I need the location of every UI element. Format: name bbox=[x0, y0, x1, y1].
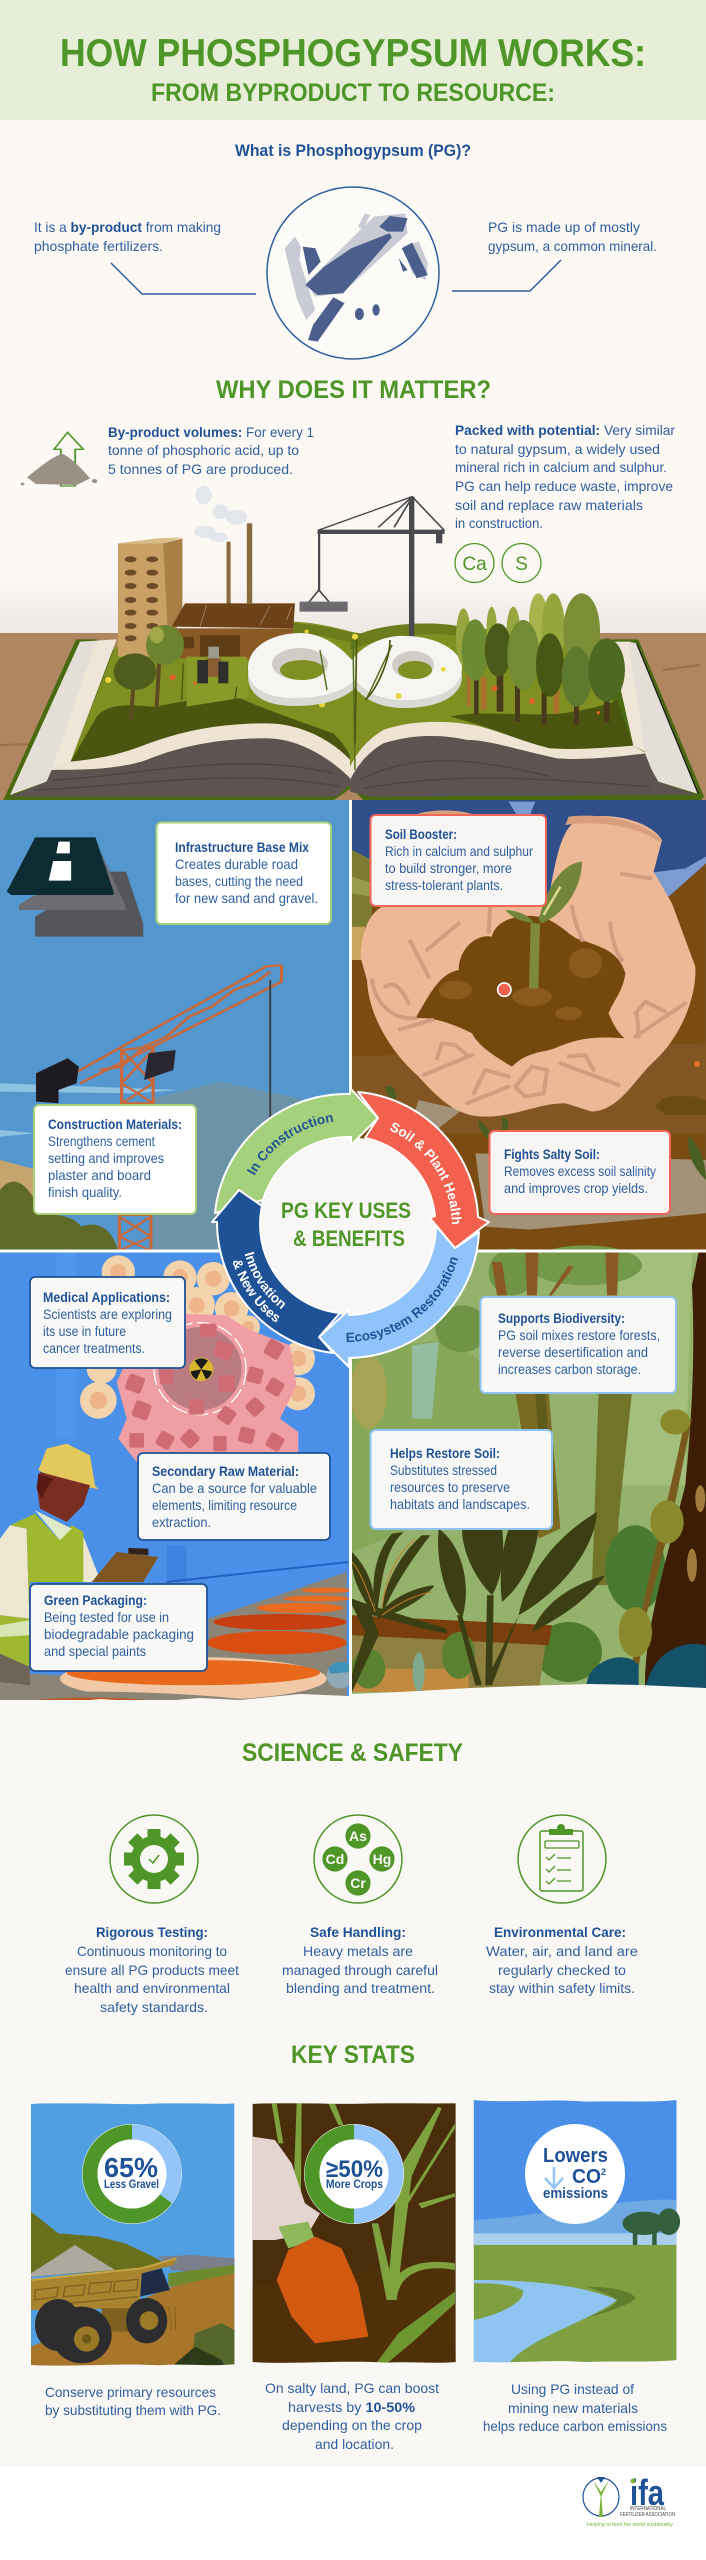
text: rigorous testing: ensure all PG products meet bbox=[65, 1962, 239, 1978]
text: safe handling: blending and treatment. bbox=[286, 1980, 435, 1996]
card: helps restore soil: Substitutes stressed bbox=[390, 1462, 497, 1478]
panel: soil and plant health bbox=[352, 800, 706, 1250]
callout line left bbox=[111, 263, 256, 294]
card: fights salty soil: Fights Salty Soil: bbox=[504, 1146, 600, 1162]
illustration: cells, worker and conveyor bbox=[0, 1252, 353, 1702]
footer band bbox=[0, 2467, 706, 2560]
text: environmental care bbox=[486, 1924, 638, 1996]
card: infrastructure base mix: bases, cutting the need bbox=[175, 873, 303, 889]
text: rigorous testing bbox=[65, 1924, 239, 2015]
text: made of gypsum: gypsum, a common mineral. bbox=[488, 238, 657, 254]
logo: IFA: FERTILIZER ASSOCIATION bbox=[620, 2512, 675, 2518]
illustration: open book with landscape bbox=[0, 486, 706, 803]
text: rigorous testing: health and environmental bbox=[74, 1980, 230, 1996]
caption: carbon emissions: Using PG instead of bbox=[511, 2381, 634, 2397]
text: environmental care: stay within safety limits. bbox=[489, 1980, 635, 1996]
section: science and safety bbox=[65, 1739, 638, 2015]
heading: PG key uses and benefits: & BENEFITS bbox=[293, 1226, 405, 1251]
icon: heavy metal elements: Hg bbox=[373, 1851, 391, 1867]
heading: PG key uses and benefits bbox=[281, 1198, 411, 1251]
icon: gear with check bbox=[110, 1815, 198, 1903]
panel: in construction bbox=[0, 800, 349, 1251]
donut: 65 percent bbox=[82, 2124, 182, 2224]
text: by-product volumes: 5 tonnes of PG are produced. bbox=[108, 461, 293, 477]
logo: IFA bbox=[583, 2472, 675, 2528]
card: secondary raw material bbox=[138, 1453, 330, 1540]
card: green packaging bbox=[30, 1584, 207, 1671]
diagram: PG key uses cycle bbox=[211, 1088, 490, 1368]
card: green packaging: Green Packaging: bbox=[44, 1592, 147, 1608]
badge: lowers CO2 emissions: Lowers bbox=[543, 2145, 608, 2167]
logo: IFA: Helping to feed the world sustainably bbox=[587, 2522, 673, 2528]
icon: pile with up arrow bbox=[21, 432, 97, 486]
icon: heavy metal elements: Cd bbox=[326, 1851, 344, 1867]
text: rigorous testing: Rigorous Testing: bbox=[96, 1924, 208, 1940]
card: supports biodiversity: Supports Biodiversity: bbox=[498, 1310, 625, 1326]
icon: checklist clipboard bbox=[518, 1815, 606, 1903]
panel dividers bbox=[0, 800, 706, 1700]
card: soil booster: to build stronger, more bbox=[385, 860, 512, 876]
center disc bbox=[258, 1137, 436, 1315]
caption: conserve resources: by substituting them with PG. bbox=[45, 2402, 221, 2418]
logo: IFA: ifa bbox=[630, 2472, 665, 2513]
arrow: innovation and new uses bbox=[211, 1189, 341, 1354]
card: supports biodiversity: increases carbon storage. bbox=[498, 1361, 641, 1377]
illustration: tower, chimneys and crane bbox=[118, 486, 445, 657]
card: construction materials: setting and improves bbox=[48, 1150, 164, 1166]
text: environmental care: Water, air, and land are bbox=[486, 1943, 638, 1959]
illustration: barn, tractor, trees bbox=[105, 603, 325, 720]
card: secondary raw material: Can be a source for valuable bbox=[152, 1480, 317, 1496]
text: packed with potential: PG can help reduce waste, improve bbox=[455, 478, 673, 494]
arrow: ecosystem restoration bbox=[320, 1226, 480, 1368]
card: green packaging: Being tested for use in bbox=[44, 1609, 169, 1625]
badge: lowers CO2 emissions: CO bbox=[572, 2166, 601, 2188]
panel: innovation and new uses bbox=[0, 1252, 353, 1702]
icon: heavy metal elements: As bbox=[349, 1828, 367, 1844]
card: secondary raw material: elements, limiting resource bbox=[152, 1497, 297, 1513]
callout line right bbox=[452, 260, 561, 291]
card: infrastructure base mix: Infrastructure Base Mix bbox=[175, 839, 309, 855]
caption: carbon emissions bbox=[483, 2381, 667, 2434]
card: construction materials: Construction Materials: bbox=[48, 1116, 182, 1132]
text: environmental care: regularly checked to bbox=[498, 1962, 626, 1978]
section: what is phosphogypsum bbox=[34, 142, 657, 359]
card: fights salty soil: Removes excess soil salinity bbox=[504, 1163, 656, 1179]
arrow: soil and plant health bbox=[357, 1091, 490, 1249]
text: by-product: It is a by-product from making bbox=[34, 219, 221, 235]
text: safe handling: Heavy metals are bbox=[303, 1943, 413, 1959]
card: infrastructure base mix: Creates durable road bbox=[175, 856, 298, 872]
icon: heavy metal elements bbox=[314, 1815, 402, 1903]
text: packed with potential: to natural gypsum, a widely used bbox=[455, 441, 660, 457]
card: construction materials: plaster and board bbox=[48, 1167, 151, 1183]
caption: boost harvests: harvests by 10-50% bbox=[288, 2399, 416, 2415]
subtitle: FROM BYPRODUCT TO RESOURCE: bbox=[151, 79, 555, 107]
card: infrastructure base mix bbox=[156, 822, 331, 924]
text: by-product volumes bbox=[108, 424, 314, 477]
text: made of gypsum bbox=[488, 219, 657, 254]
card: soil booster: Rich in calcium and sulphur bbox=[385, 843, 533, 859]
text: safe handling: managed through careful bbox=[282, 1962, 438, 1978]
caption: conserve resources bbox=[45, 2384, 221, 2418]
text: packed with potential: Packed with potential: Very similar bbox=[455, 422, 675, 438]
arrow: innovation and new uses: & New Uses bbox=[233, 1260, 280, 1322]
card: green packaging: and special paints bbox=[44, 1643, 146, 1659]
text: made of gypsum: PG is made up of mostly bbox=[488, 219, 640, 235]
icon: calcium badge bbox=[455, 544, 494, 582]
arrow: innovation and new uses: Innovation bbox=[244, 1252, 285, 1309]
icon: gypsum crystals in circle bbox=[267, 187, 439, 359]
donut: 50 percent more crops bbox=[304, 2124, 404, 2224]
text: by-product bbox=[34, 219, 221, 254]
title: HOW PHOSPHOGYPSUM WORKS: bbox=[60, 32, 646, 75]
stat card: mining truck bbox=[31, 2100, 234, 2418]
card: secondary raw material: extraction. bbox=[152, 1514, 211, 1530]
card: soil booster: Soil Booster: bbox=[385, 826, 457, 842]
torn paper edge and lower background bbox=[0, 1684, 706, 2467]
text: packed with potential: soil and replace raw materials bbox=[455, 497, 643, 513]
card: helps restore soil: habitats and landscapes. bbox=[390, 1496, 530, 1512]
badge: lowers CO2 emissions bbox=[525, 2124, 625, 2224]
card: medical applications: cancer treatments. bbox=[43, 1340, 145, 1356]
section: key stats bbox=[31, 2041, 680, 2452]
stat card: river bbox=[474, 2090, 680, 2434]
text: packed with potential: in construction. bbox=[455, 515, 543, 531]
caption: conserve resources: Conserve primary resources bbox=[45, 2384, 216, 2400]
card: fights salty soil: and improves crop yields. bbox=[504, 1180, 648, 1196]
card: helps restore soil bbox=[370, 1430, 552, 1529]
text: by-product volumes: By-product volumes: For every 1 bbox=[108, 424, 314, 440]
caption: carbon emissions: mining new materials bbox=[508, 2400, 638, 2416]
arrow: in construction bbox=[214, 1088, 379, 1214]
icon: sulphur badge bbox=[502, 544, 541, 582]
donut: 65 percent: 65% bbox=[104, 2152, 158, 2183]
card: soil booster: stress-tolerant plants. bbox=[385, 877, 503, 893]
illustration: sky road and crane bbox=[0, 800, 349, 1251]
text: environmental care: Environmental Care: bbox=[494, 1924, 626, 1940]
card: secondary raw material: Secondary Raw Material: bbox=[152, 1463, 299, 1479]
text: rigorous testing: safety standards. bbox=[100, 1999, 208, 2015]
card: fights salty soil bbox=[490, 1131, 670, 1214]
logo: IFA: INTERNATIONAL bbox=[630, 2506, 666, 2512]
stat card: carrot bbox=[253, 2100, 456, 2452]
book left half bbox=[3, 622, 360, 802]
card: medical applications: Scientists are exploring bbox=[43, 1306, 172, 1322]
card: soil booster bbox=[370, 815, 546, 906]
heading: PG key uses and benefits: PG KEY USES bbox=[281, 1198, 411, 1223]
caption: boost harvests: and location. bbox=[315, 2436, 394, 2452]
card: supports biodiversity bbox=[480, 1297, 676, 1393]
text: safe handling: Safe Handling: bbox=[310, 1924, 406, 1940]
section: why does it matter bbox=[0, 376, 706, 803]
card: construction materials: finish quality. bbox=[48, 1184, 122, 1200]
card: medical applications bbox=[30, 1277, 185, 1368]
donut: 65 percent: Less Gravel bbox=[104, 2177, 159, 2191]
book right half bbox=[350, 623, 704, 802]
heading: what is PG: What is Phosphogypsum (PG)? bbox=[235, 142, 471, 160]
panel: ecosystem restoration bbox=[350, 1245, 706, 1702]
arrow: ecosystem restoration: Ecosystem Restoration bbox=[346, 1257, 458, 1342]
badge: lowers CO2 emissions: emissions bbox=[543, 2186, 608, 2202]
text: by-product volumes: tonne of phosphoric acid, up to bbox=[108, 442, 299, 458]
illustration: conifer forest bbox=[352, 593, 625, 743]
card: supports biodiversity: reverse desertification and bbox=[498, 1344, 648, 1360]
card: medical applications: its use in future bbox=[43, 1323, 126, 1339]
badge: lowers CO2 emissions: 2 bbox=[601, 2167, 606, 2177]
illustration: forest bbox=[350, 1245, 706, 1702]
card: construction materials: Strengthens cement bbox=[48, 1133, 155, 1149]
text: rigorous testing: Continuous monitoring to bbox=[77, 1943, 227, 1959]
donut: 50 percent more crops: ≥50% bbox=[326, 2156, 383, 2183]
header band bbox=[0, 0, 706, 120]
caption: boost harvests: depending on the crop bbox=[282, 2417, 422, 2433]
caption: boost harvests bbox=[265, 2380, 439, 2452]
card: green packaging: biodegradable packaging bbox=[44, 1626, 194, 1642]
illustration: hands holding seedling bbox=[352, 800, 706, 1250]
caption: boost harvests: On salty land, PG can boost bbox=[265, 2380, 439, 2396]
heading: science and safety: SCIENCE & SAFETY bbox=[242, 1739, 463, 1767]
heading: key stats: KEY STATS bbox=[291, 2041, 415, 2069]
arrow: soil and plant health: Soil & Plant Health bbox=[390, 1122, 462, 1224]
card: infrastructure base mix: for new sand and gravel. bbox=[175, 890, 318, 906]
donut: 50 percent more crops: More Crops bbox=[326, 2177, 383, 2191]
text: safe handling bbox=[282, 1924, 438, 1996]
card: helps restore soil: Helps Restore Soil: bbox=[390, 1445, 500, 1461]
card: helps restore soil: resources to preserve bbox=[390, 1479, 510, 1495]
card: medical applications: Medical Applications: bbox=[43, 1289, 170, 1305]
heading: why does it matter: WHY DOES IT MATTER? bbox=[216, 376, 491, 404]
icon: heavy metal elements: Cr bbox=[350, 1875, 366, 1891]
text: packed with potential bbox=[455, 422, 675, 531]
icon: sulphur badge: S bbox=[515, 554, 528, 575]
text: packed with potential: mineral rich in calcium and sulphur. bbox=[455, 459, 667, 475]
card: construction materials bbox=[34, 1105, 196, 1214]
card: supports biodiversity: PG soil mixes restore forests, bbox=[498, 1327, 660, 1343]
illustration: infinity loop bbox=[248, 633, 462, 770]
icon: calcium badge: Ca bbox=[462, 554, 487, 575]
caption: carbon emissions: helps reduce carbon emissions bbox=[483, 2418, 667, 2434]
arrow: in construction: In Construction bbox=[246, 1115, 334, 1176]
text: by-product: phosphate fertilizers. bbox=[34, 238, 163, 254]
